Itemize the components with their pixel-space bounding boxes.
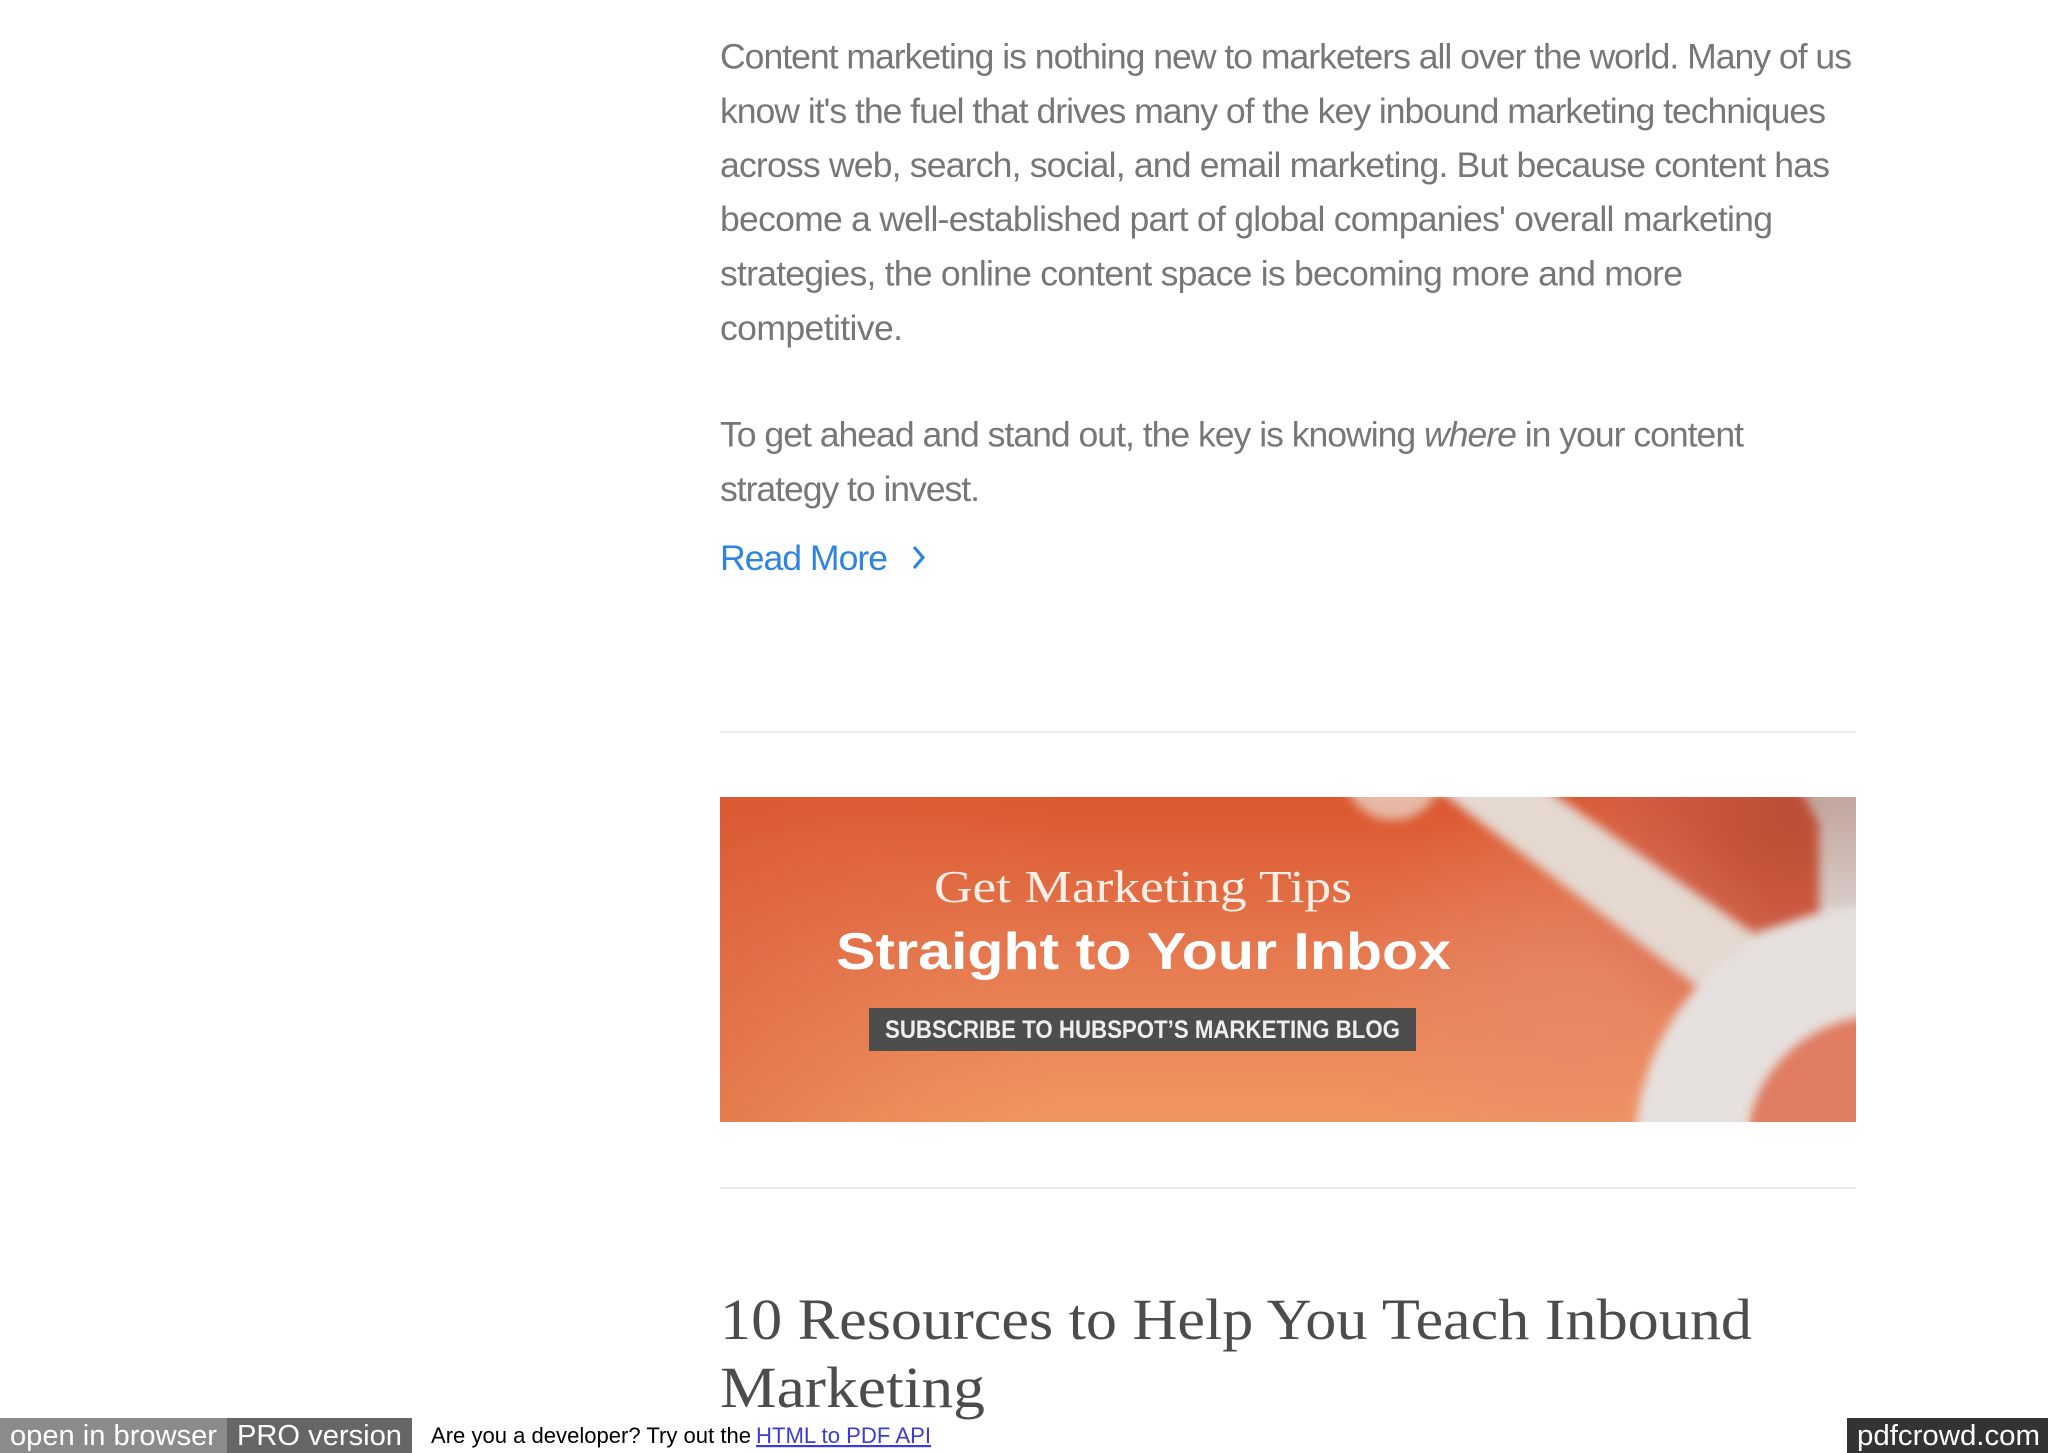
article text: intro paragraph: Content marketing is nothing new to marketers all over the world. Many of us [720,36,1852,76]
footer: open in browser button: open in browser [10,1420,217,1452]
footer: pdfcrowd badge: pdfcrowd.com [1857,1420,2040,1452]
footer: developer prompt: Are you a developer? Try out the [431,1423,751,1448]
footer: developer prompt: HTML to PDF API [756,1423,931,1448]
article text: second paragraph [720,414,1744,509]
footer: developer prompt [431,1423,931,1448]
article text: intro paragraph: competitive. [720,308,903,348]
subscribe button [869,1008,1416,1051]
article text: second paragraph: strategy to invest. [720,469,980,509]
article text: intro paragraph: across web, search, social, and email marketing. But because content has [720,145,1830,185]
article text: intro paragraph [720,36,1852,348]
article text: intro paragraph: become a well-established part of global companies' overall marketing [720,199,1773,239]
subscribe banner [720,797,1856,1122]
read more link with chevron: Read More [720,538,888,578]
article text: intro paragraph: strategies, the online content space is becoming more and more [720,254,1683,294]
footer: pro version button: PRO version [237,1420,402,1452]
next article heading: Marketing [720,1355,985,1420]
banner headline bold: Straight to Your Inbox [836,923,1451,981]
banner headline serif: Get Marketing Tips [934,861,1352,912]
article text: intro paragraph: know it's the fuel that drives many of the key inbound marketing techniques [720,91,1826,131]
next article heading [720,1287,1752,1420]
next article heading: 10 Resources to Help You Teach Inbound [720,1287,1752,1352]
banner background with blurred logo [720,797,1856,1122]
subscribe button: SUBSCRIBE TO HUBSPOT’S MARKETING BLOG [885,1016,1400,1044]
article text: second paragraph: To get ahead and stand out, the key is knowing where in your content [720,414,1744,454]
